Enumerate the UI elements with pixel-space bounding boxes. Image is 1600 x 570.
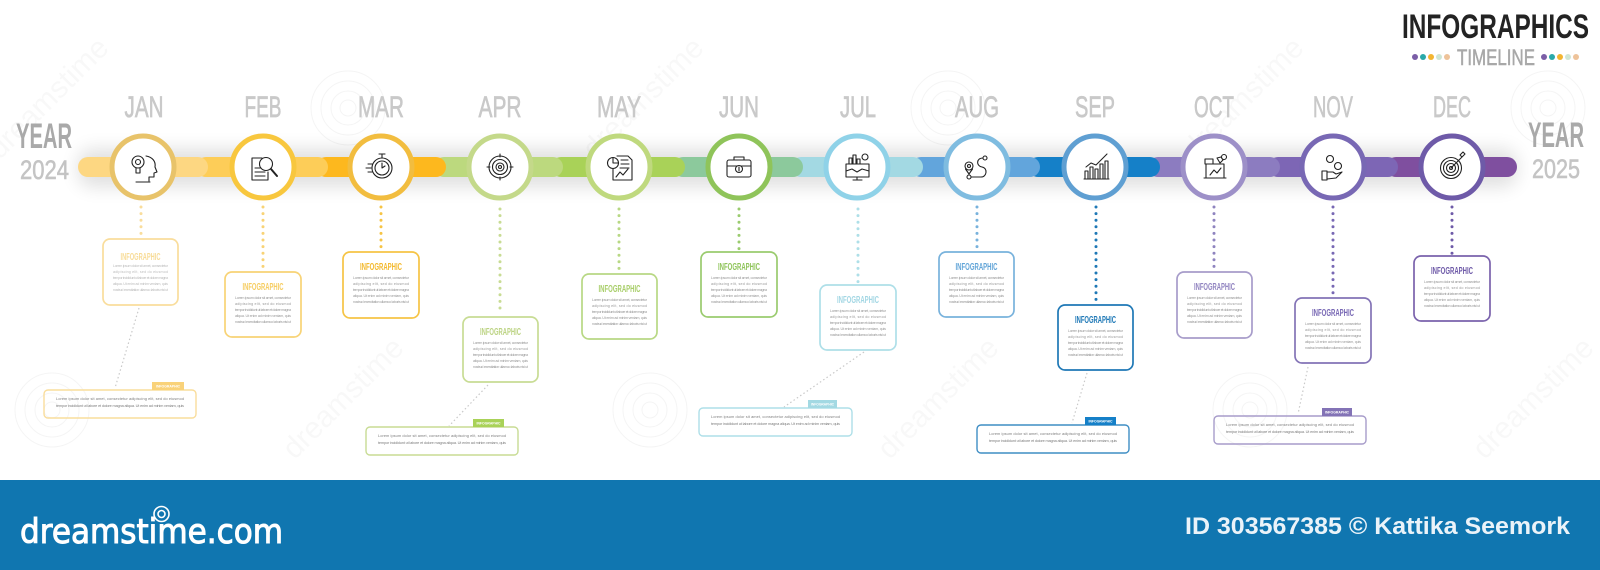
node: dec xyxy=(1421,136,1483,198)
panel: mar card: INFOGRAPHIC xyxy=(360,261,402,273)
panel: feb card: Lorem ipsum dolor sit amet, consectetur xyxy=(235,296,292,300)
panel: sep card: aliqua. Ut enim ad minim veniam, quis xyxy=(1068,347,1123,351)
decorative dots xyxy=(1412,54,1579,60)
note: sep: Lorem ipsum dolor sit amet, consectetur adipiscing elit, sed do eiusmod xyxy=(989,431,1117,436)
month labels: SEP xyxy=(1075,91,1115,124)
panel: nov card: Lorem ipsum dolor sit amet, consectetur xyxy=(1305,322,1362,326)
panel: may card xyxy=(582,274,657,339)
icon: briefcase with dollar xyxy=(727,157,751,177)
panel: jul card: INFOGRAPHIC xyxy=(837,294,879,306)
node: apr xyxy=(469,136,531,198)
label: year 2024: 2024 xyxy=(20,155,69,185)
panel: nov card: tempor incididunt ut labore et dolore magna xyxy=(1305,334,1362,338)
panel: jul card: Lorem ipsum dolor sit amet, consectetur xyxy=(830,309,887,313)
label: year 2025: 2025 xyxy=(1532,154,1580,184)
node: mar xyxy=(350,136,412,198)
panel: oct card: nostrud exercitation ullamco laboris nisi ut xyxy=(1187,320,1242,324)
note: sep xyxy=(977,417,1129,453)
panel: mar card xyxy=(343,252,419,318)
panel: mar card: aliqua. Ut enim ad minim veniam, quis xyxy=(353,294,409,298)
panel: apr card: nostrud exercitation ullamco laboris nisi ut xyxy=(473,365,528,369)
subheading: TIMELINE xyxy=(1457,45,1535,70)
panel: apr card: Lorem ipsum dolor sit amet, consectetur xyxy=(473,341,529,345)
panel: mar card: nostrud exercitation ullamco laboris nisi ut xyxy=(353,300,409,304)
panel: apr card xyxy=(463,317,538,382)
panel: aug card: Lorem ipsum dolor sit amet, consectetur xyxy=(949,276,1005,280)
label: year 2024 xyxy=(16,117,72,185)
note: jul: Lorem ipsum dolor sit amet, consectetur adipiscing elit, sed do eiusmod xyxy=(711,414,840,419)
panel: may card: INFOGRAPHIC xyxy=(598,283,641,295)
icon: monitor with dashboard xyxy=(846,154,869,180)
watermark pattern: dreamstime xyxy=(276,331,410,465)
icon: radial target xyxy=(487,154,513,180)
node: nov xyxy=(1302,136,1364,198)
month labels: DEC xyxy=(1433,91,1471,124)
panel: may card: adipiscing elit, sed do eiusmod xyxy=(592,304,647,308)
panel: mar card: adipiscing elit, sed do eiusmod xyxy=(353,282,409,286)
month labels: MAY xyxy=(597,91,641,124)
node: sep xyxy=(1064,136,1126,198)
panel: jan card xyxy=(103,239,178,305)
panel: apr card: tempor incididunt ut labore et dolore magna xyxy=(473,353,529,357)
note: nov: Lorem ipsum dolor sit amet, consectetur adipiscing elit, sed do eiusmod xyxy=(1226,422,1354,427)
month labels: APR xyxy=(478,91,522,124)
panel: oct card xyxy=(1177,272,1252,338)
panel: jul card: adipiscing elit, sed do eiusmod xyxy=(830,315,886,319)
logo spiral icon xyxy=(154,506,169,522)
panel: jun card: Lorem ipsum dolor sit amet, consectetur xyxy=(711,276,768,280)
panel: oct card: Lorem ipsum dolor sit amet, consectetur xyxy=(1187,296,1243,300)
icon: report with chart xyxy=(608,156,632,180)
month labels: NOV xyxy=(1313,91,1353,124)
panel: jul card: aliqua. Ut enim ad minim veniam, quis xyxy=(830,327,886,331)
panel: jan card: adipiscing elit, sed do eiusmod xyxy=(113,270,168,274)
panel: dec card: INFOGRAPHIC xyxy=(1431,265,1473,277)
panel: jul card xyxy=(820,285,896,350)
panel: dec card: tempor incididunt ut labore et dolore magna xyxy=(1424,292,1481,296)
panel: jan card: Lorem ipsum dolor sit amet, consectetur xyxy=(113,264,169,268)
panel: nov card xyxy=(1295,298,1371,363)
panel: may card: nostrud exercitation ullamco laboris nisi ut xyxy=(592,322,647,326)
note: jul: tempor incididunt ut labore et dolore magna aliqua. Ut enim ad minim veniam, quis xyxy=(711,421,840,426)
panel: oct card: tempor incididunt ut labore et dolore magna xyxy=(1187,308,1243,312)
panel: jun card: adipiscing elit, sed do eiusmod xyxy=(711,282,767,286)
panel: feb card: tempor incididunt ut labore et dolore magna xyxy=(235,308,292,312)
month labels xyxy=(124,91,1471,124)
icon: laptop with analytics xyxy=(1204,154,1226,178)
icon: head with light bulb xyxy=(132,156,157,182)
logo text: dreamstime.com xyxy=(20,512,283,552)
panel: feb card xyxy=(225,272,301,337)
panel: feb card: nostrud exercitation ullamco laboris nisi ut xyxy=(235,320,291,324)
panel: jul card: tempor incididunt ut labore et dolore magna xyxy=(830,321,887,325)
panel: sep card: INFOGRAPHIC xyxy=(1075,314,1116,326)
panel: aug card: tempor incididunt ut labore et dolore magna xyxy=(949,288,1005,292)
label: year 2024: YEAR xyxy=(16,117,72,156)
panel: apr card: aliqua. Ut enim ad minim veniam, quis xyxy=(473,359,528,363)
icon: stopwatch xyxy=(366,154,392,178)
panel: sep card: nostrud exercitation ullamco laboris nisi ut xyxy=(1068,353,1123,357)
panel: nov card: INFOGRAPHIC xyxy=(1312,307,1354,319)
timeline bar xyxy=(78,149,1517,187)
watermark pattern: dreamstime xyxy=(1466,331,1600,465)
panel: aug card: nostrud exercitation ullamco laboris nisi ut xyxy=(949,300,1004,304)
node: oct xyxy=(1183,136,1245,198)
panel: jul card: nostrud exercitation ullamco laboris nisi ut xyxy=(830,333,886,337)
panel: aug card: adipiscing elit, sed do eiusmod xyxy=(949,282,1004,286)
panel: mar card: tempor incididunt ut labore et dolore magna xyxy=(353,288,410,292)
month labels: AUG xyxy=(955,91,999,124)
note: jan: INFOGRAPHIC xyxy=(156,384,180,388)
note: nov xyxy=(1214,408,1366,444)
note: apr: INFOGRAPHIC xyxy=(476,420,501,426)
icon: hand with coins xyxy=(1322,156,1342,180)
icon: document with magnifier xyxy=(252,158,277,180)
dotted connectors xyxy=(115,308,1308,426)
note: jul: INFOGRAPHIC xyxy=(811,402,834,406)
panel: aug card xyxy=(939,252,1014,317)
panel: apr card: INFOGRAPHIC xyxy=(480,326,521,338)
panel: oct card: aliqua. Ut enim ad minim veniam, quis xyxy=(1187,314,1242,318)
panel: jun card: tempor incididunt ut labore et dolore magna xyxy=(711,288,768,292)
panel: feb card: INFOGRAPHIC xyxy=(242,281,284,293)
note: apr: tempor incididunt ut labore et dolore magna aliqua. Ut enim ad minim veniam, quis xyxy=(378,440,506,445)
month labels: MAR xyxy=(358,91,404,124)
note: apr xyxy=(366,419,518,455)
dotted stems xyxy=(141,207,1452,314)
note: jul xyxy=(699,400,852,436)
icon: growth bar chart xyxy=(1084,154,1109,179)
panel: oct card: adipiscing elit, sed do eiusmod xyxy=(1187,302,1242,306)
title: infographics timeline xyxy=(1402,8,1589,70)
panel: sep card xyxy=(1058,305,1133,370)
note: jan: Lorem ipsum dolor sit amet, consectetur adipiscing elit, sed do eiusmod xyxy=(56,396,184,401)
panel: jan card: nostrud exercitation ullamco laboris nisi ut xyxy=(113,288,168,292)
icon: route with pin xyxy=(965,156,987,179)
panel: sep card: Lorem ipsum dolor sit amet, consectetur xyxy=(1068,329,1124,333)
watermark pattern: dreamstime xyxy=(576,31,710,165)
panel: aug card: aliqua. Ut enim ad minim veniam, quis xyxy=(949,294,1004,298)
node: jul xyxy=(826,136,888,198)
panel: jun card: INFOGRAPHIC xyxy=(718,261,760,273)
note: apr: Lorem ipsum dolor sit amet, consectetur adipiscing elit, sed do eiusmod xyxy=(378,433,506,438)
note: jan xyxy=(44,382,196,418)
image id and author: ID 303567385 © Kattika Seemork xyxy=(1185,513,1571,540)
panel: aug card: INFOGRAPHIC xyxy=(956,261,998,273)
node: feb xyxy=(232,136,294,198)
note: sep: INFOGRAPHIC xyxy=(1088,418,1113,424)
panel: mar card: Lorem ipsum dolor sit amet, consectetur xyxy=(353,276,410,280)
panel: feb card: aliqua. Ut enim ad minim veniam, quis xyxy=(235,314,291,318)
watermark pattern xyxy=(0,31,1600,465)
panel: feb card: adipiscing elit, sed do eiusmod xyxy=(235,302,291,306)
panel: dec card: nostrud exercitation ullamco laboris nisi ut xyxy=(1424,304,1480,308)
node: may xyxy=(588,136,650,198)
panel: may card: tempor incididunt ut labore et dolore magna xyxy=(592,310,648,314)
panel: jan card: INFOGRAPHIC xyxy=(120,251,161,263)
panel: oct card: INFOGRAPHIC xyxy=(1194,281,1235,293)
panel: nov card: nostrud exercitation ullamco laboris nisi ut xyxy=(1305,346,1361,350)
label: year 2025 xyxy=(1528,116,1584,184)
panel: dec card: aliqua. Ut enim ad minim veniam, quis xyxy=(1424,298,1480,302)
panel: jan card: tempor incididunt ut labore et dolore magna xyxy=(113,276,169,280)
panel: apr card: adipiscing elit, sed do eiusmod xyxy=(473,347,528,351)
note: sep: tempor incididunt ut labore et dolore magna aliqua. Ut enim ad minim veniam, quis xyxy=(989,438,1117,443)
panel: sep card: tempor incididunt ut labore et dolore magna xyxy=(1068,341,1124,345)
node: aug xyxy=(946,136,1008,198)
panel: jun card: nostrud exercitation ullamco laboris nisi ut xyxy=(711,300,767,304)
month labels: JUN xyxy=(719,91,759,124)
footer banner xyxy=(0,480,1600,570)
panel: may card: aliqua. Ut enim ad minim veniam, quis xyxy=(592,316,647,320)
panel: sep card: adipiscing elit, sed do eiusmod xyxy=(1068,335,1123,339)
month labels: FEB xyxy=(244,91,282,124)
month labels: JUL xyxy=(840,91,876,124)
panel: dec card: Lorem ipsum dolor sit amet, consectetur xyxy=(1424,280,1481,284)
watermark pattern: dreamstime xyxy=(871,331,1005,465)
panel: dec card: adipiscing elit, sed do eiusmod xyxy=(1424,286,1480,290)
panel: may card: Lorem ipsum dolor sit amet, consectetur xyxy=(592,298,648,302)
panel: jan card: aliqua. Ut enim ad minim veniam, quis xyxy=(113,282,168,286)
note: nov: tempor incididunt ut labore et dolore magna aliqua. Ut enim ad minim veniam, quis xyxy=(1226,429,1354,434)
icon: bullseye target xyxy=(1440,152,1465,178)
panel: jun card xyxy=(701,252,777,317)
note: nov: INFOGRAPHIC xyxy=(1325,410,1349,414)
note: jan: tempor incididunt ut labore et dolore magna aliqua. Ut enim ad minim veniam, quis xyxy=(56,403,184,408)
panel: jun card: aliqua. Ut enim ad minim veniam, quis xyxy=(711,294,767,298)
month labels: JAN xyxy=(124,91,164,124)
panel: nov card: adipiscing elit, sed do eiusmod xyxy=(1305,328,1361,332)
node: jun xyxy=(708,136,770,198)
month labels: OCT xyxy=(1194,91,1234,124)
watermark pattern: dreamstime xyxy=(1176,31,1310,165)
panel: nov card: aliqua. Ut enim ad minim veniam, quis xyxy=(1305,340,1361,344)
panel: dec card xyxy=(1414,256,1490,321)
node: jan xyxy=(112,136,174,198)
